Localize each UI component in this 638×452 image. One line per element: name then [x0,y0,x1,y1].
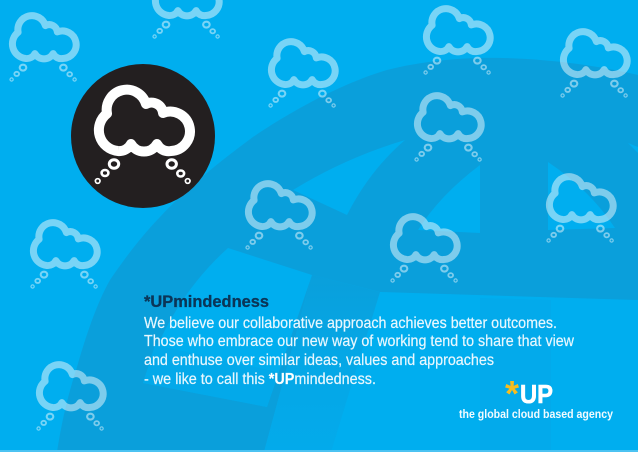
body text [144,315,574,388]
body text: Those who embrace our new way of working tend to share that view [144,333,574,350]
icon: faint cloud 6 [415,96,481,161]
icon: black circle with white thought cloud [71,64,215,208]
body text: We believe our collaborative approach achieves better outcomes. [144,315,557,332]
icon: faint cloud 3 [269,42,335,107]
icon: faint cloud 9 [391,217,457,282]
icon: faint cloud 2 [153,0,219,38]
heading: *UPmindedness [144,292,269,311]
body text: - we like to call this *UPmindedness. [144,371,376,388]
logo: *UP: * [505,373,519,414]
logo: *UP: UP [520,379,553,409]
icon: faint cloud 11 [37,365,103,430]
icon: faint cloud 5 [561,32,627,97]
icon: faint cloud 4 [424,9,490,74]
icon: faint cloud 8 [246,184,312,249]
body text: and enthuse over similar ideas, values and approaches [144,352,494,369]
icon: faint cloud 10 [31,223,97,288]
icon: faint cloud 1 [10,16,76,81]
logo: *UP [505,373,553,414]
icon: faint cloud 7 [547,177,613,242]
tagline: the global cloud based agency [459,409,614,421]
